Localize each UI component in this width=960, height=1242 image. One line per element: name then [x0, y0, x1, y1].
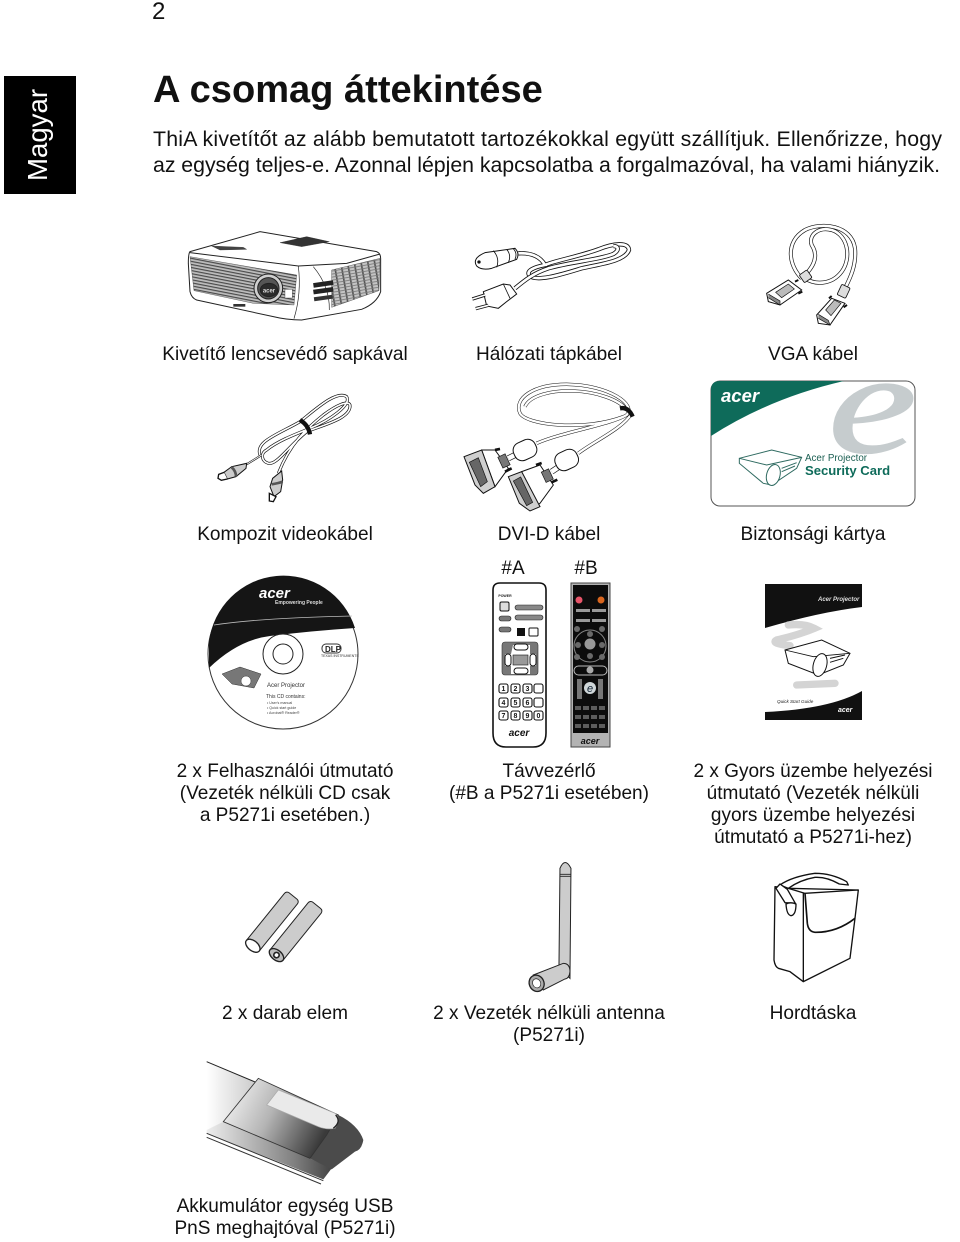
- label: user guide: a P5271i esetében.): [200, 805, 370, 826]
- icon: remote A: 8: [514, 713, 518, 720]
- icon: user guide CD: Empowering People: [275, 600, 323, 606]
- label: user guide: 2 x Felhasználói útmutató: [177, 761, 393, 782]
- icon: user guide CD: TEXAS INSTRUMENTS: [321, 654, 359, 658]
- icon: remote A: 0: [537, 713, 541, 720]
- icon: remote A: 2: [514, 686, 518, 693]
- label: projector: Kivetítő lencsevédő sapkával: [162, 344, 408, 365]
- icon: composite video cable: [218, 395, 350, 502]
- label: security card: Biztonsági kártya: [741, 524, 886, 545]
- intro text: az egység teljes-e. Azonnal lépjen kapcsolatba a forgalmazóval, ha valami hiányzik.: [153, 153, 940, 177]
- icon: quick start guide: acer: [838, 707, 854, 714]
- label: user guide: (Vezeték nélküli CD csak: [180, 783, 391, 804]
- label: antenna: 2 x Vezeték nélküli antenna: [433, 1003, 665, 1024]
- icon: batteries: [243, 891, 323, 964]
- label: quick guide: útmutató (Vezeték nélküli: [707, 783, 919, 804]
- icon: remote A: POWER: [498, 594, 512, 598]
- cover projector drawing: [775, 625, 850, 685]
- label: quick guide: útmutató a P5271i-hez): [714, 827, 912, 848]
- icon: remote A: 9: [526, 713, 530, 720]
- label: batteries: 2 x darab elem: [222, 1003, 348, 1024]
- icon: remote A: 6: [526, 700, 530, 707]
- icon: user guide CD: This CD contains:: [266, 694, 305, 700]
- icon: carrying bag: [774, 873, 858, 982]
- icon: remote A: 1: [502, 686, 506, 693]
- label: DVI-D cable: DVI-D kábel: [498, 524, 600, 545]
- card projector drawing: [739, 450, 802, 487]
- label: user guide: [177, 761, 393, 826]
- icon: power cable: [472, 244, 629, 309]
- intro text: ThiA kivetítőt az alább bemutatott tartozékokkal együtt szállítjuk. Ellenőrizze, hogy: [153, 127, 942, 151]
- label: VGA cable: VGA kábel: [768, 344, 858, 365]
- icon: DVI-D cable: [464, 384, 633, 511]
- icon: VGA cable: [767, 226, 855, 325]
- label: antenna: [433, 1003, 665, 1046]
- label: quick guide: [693, 761, 933, 848]
- label: power cable: Hálózati tápkábel: [476, 344, 622, 365]
- icon: user guide CD: [208, 576, 359, 729]
- icon: user guide CD: acer: [259, 585, 291, 602]
- icon: remote A: acer: [509, 728, 530, 739]
- icon: user guide CD: Acer Projector: [267, 683, 305, 689]
- icon: quick start guide: [765, 584, 862, 720]
- intro text: [153, 127, 942, 177]
- label: quick guide: gyors üzembe helyezési: [711, 805, 915, 826]
- label: USB dongle: Akkumulátor egység USB: [177, 1196, 393, 1217]
- big letter e: e: [828, 324, 917, 483]
- label: remote A: #A: [501, 558, 525, 579]
- label: carrying bag: Hordtáska: [770, 1003, 857, 1024]
- icon: remote A: [493, 583, 546, 747]
- icon: remote B: [571, 583, 610, 747]
- icon: security card: Acer Projector: [805, 453, 868, 464]
- icon: user guide CD: • Acrobat® Reader®: [267, 711, 300, 715]
- icon: quick start guide: Quick Start Guide: [777, 699, 814, 704]
- icon: remote A: 3: [526, 686, 530, 693]
- icon: user guide CD: • User's manual: [267, 701, 292, 705]
- label: USB dongle: [174, 1196, 396, 1239]
- label: remote: [449, 761, 649, 804]
- icon: remote A: 5: [514, 700, 518, 707]
- language tab: Magyar: [22, 89, 53, 181]
- label: remote: Távvezérlő: [502, 761, 596, 782]
- icon: wireless antenna: [526, 862, 571, 994]
- icon: projector: acer: [263, 289, 276, 295]
- label: antenna: (P5271i): [513, 1025, 585, 1046]
- icon: user guide CD: • Quick start guide: [267, 706, 296, 710]
- title: A csomag áttekintése: [153, 69, 543, 111]
- icon: security card: Security Card: [805, 463, 890, 478]
- language tab: [4, 76, 76, 194]
- label: remote B: #B: [574, 558, 598, 579]
- icon: remote A: 4: [502, 700, 506, 707]
- label: composite cable: Kompozit videokábel: [197, 524, 373, 545]
- icon: remote B: acer: [581, 736, 600, 746]
- icon: security card: acer: [721, 385, 761, 406]
- icon: remote A: 7: [502, 713, 506, 720]
- label: quick guide: 2 x Gyors üzembe helyezési: [693, 761, 933, 782]
- icon: security card: [711, 324, 917, 506]
- icon: remote B: e: [587, 683, 593, 695]
- icon: USB battery dongle: [207, 1062, 363, 1184]
- icon: projector: [188, 232, 381, 320]
- label: remote: (#B a P5271i esetében): [449, 783, 649, 804]
- icon: user guide CD: DLP: [325, 645, 342, 654]
- label: USB dongle: PnS meghajtóval (P5271i): [174, 1218, 396, 1239]
- icon: quick start guide: Acer Projector: [817, 597, 860, 603]
